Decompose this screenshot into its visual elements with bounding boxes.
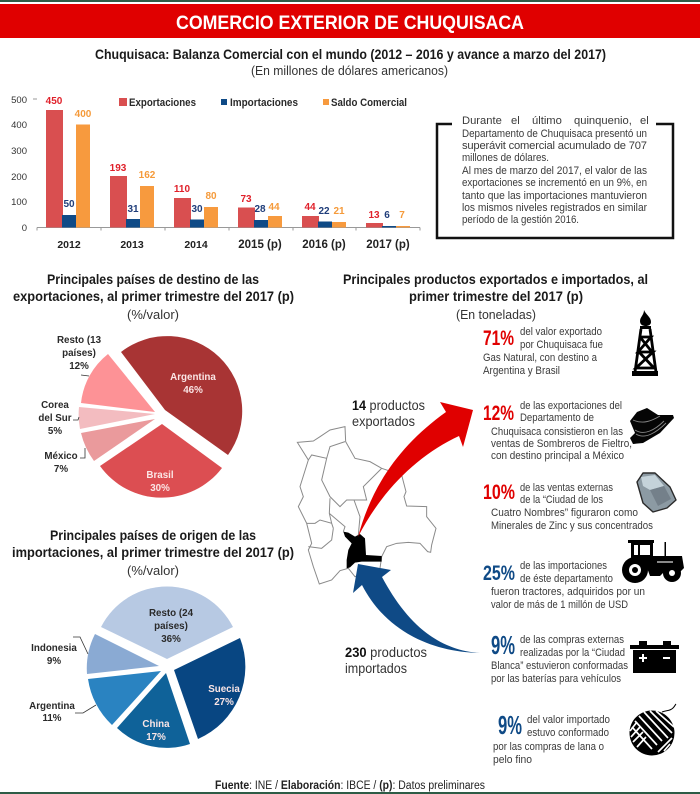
text block: gas natural: 71% [483,326,514,350]
pie chart: destino de exportaciones: países) [62,348,96,359]
pie chart: destino de exportaciones: México [44,451,78,462]
text block: lana: pelo fino [493,754,532,766]
heading: productos [343,271,648,322]
heading: productos: (En toneladas) [456,307,536,322]
pie chart: destino de exportaciones: Argentina [170,372,216,383]
text block: sombreros: de las exportaciones del [520,400,622,412]
bar chart: balanza comercial: 2014 [184,239,208,251]
text block: minerales de zinc: 10% [483,480,515,504]
callout: resumen: los mismos niveles registrados en similar [462,202,647,214]
bar chart: balanza comercial: 80 [205,191,217,202]
pie chart: destino de exportaciones: Brasil [146,470,174,481]
icon: felt hat [630,408,674,444]
bar chart: balanza comercial: 162 [139,170,156,181]
text block: sombreros [483,400,632,462]
text block: lana: por las compras de lana o [493,741,604,753]
pie chart: origen de importaciones: Suecia [208,684,240,695]
bar chart: balanza comercial [11,95,420,251]
text block: gas natural: del valor exportado [520,326,602,338]
pie chart: origen de importaciones: 27% [214,697,234,708]
callout: resumen: Al mes de marzo del 2017, el valor de las [462,165,647,177]
text block: tractores: 25% [483,561,515,585]
pie chart: origen de importaciones: Indonesia [31,643,77,654]
pie chart: origen de importaciones: 36% [161,634,181,645]
pie chart: origen de importaciones: China [142,719,170,730]
pie chart: destino de exportaciones: 5% [48,426,62,437]
pie chart: origen de importaciones [29,586,245,748]
arrow: importaciones [353,564,480,653]
chart legend: Saldo Comercial [331,97,407,109]
bar chart: balanza comercial: 300 [11,146,27,157]
pie chart: origen de importaciones: 11% [42,713,62,724]
callout: resumen: último [532,115,562,127]
label: productos importados: 230 productos [345,644,427,660]
heading: balanza comercial: (En millones de dólares americanos) [251,63,448,78]
bar chart: balanza comercial: 400 [75,109,92,120]
text block: tractores [483,560,645,611]
callout: resumen [437,115,673,238]
text block: tractores: de las importaciones [520,560,607,572]
Chuquisaca region [343,532,382,568]
text block: sombreros: Chuquisaca consistieron en las [491,426,623,438]
bar chart: balanza comercial: 2012 [57,239,81,251]
text block: lana: del valor importado [527,714,610,726]
map of Bolivia [297,427,436,584]
icon: tractor [622,540,684,583]
text block: tractores: de éste departamento [520,573,613,585]
callout: resumen: superávit comercial acumulado de 707 [462,140,647,152]
source note: Fuente: INE / Elaboración: IBCE / (p): Datos preliminares [215,780,485,792]
pie chart: destino de exportaciones: 12% [69,361,89,372]
text block: lana: estuvo conformado [527,727,609,739]
text block: lana: 9% [498,710,522,740]
bar chart: balanza comercial: 2013 [120,239,144,251]
heading: productos: primer trimestre del 2017 (p) [409,288,583,304]
bar chart: balanza comercial: 200 [11,172,27,183]
text block: minerales de zinc [483,480,653,532]
text block: lana [493,710,610,766]
heading: destino de exportaciones [13,271,294,322]
bar chart: balanza comercial: 0 [22,223,27,234]
bar chart: balanza comercial: 44 [268,202,280,213]
label: productos exportados: exportados [352,413,415,429]
chart legend [119,97,407,109]
heading: balanza comercial: Chuquisaca: Balanza Comercial con el mundo (2012 – 2016 y avance a marzo del 2017) [95,46,606,62]
text block: minerales de zinc: Minerales de Zinc y sus concentrados [491,520,653,532]
text block: sombreros: Departamento de [520,412,594,424]
pie chart: origen de importaciones: Resto (24 [149,608,194,619]
bar chart: balanza comercial: 44 [304,202,316,213]
text block: baterias: de las compras externas [520,634,624,646]
pie chart: origen de importaciones: países) [154,621,188,632]
bar chart: balanza comercial: 450 [46,96,63,107]
icon: zinc rock [637,473,676,512]
bar chart: balanza comercial: 400 [11,120,27,131]
bar chart: balanza comercial: 7 [399,210,405,221]
text block: minerales de zinc: Cuatro Nombres” figuraron como [491,507,638,519]
icon: ball of yarn [630,704,676,756]
pie chart: destino de exportaciones: 46% [183,385,203,396]
text block: sombreros: 12% [483,401,514,425]
text block: baterias: Blanca” estuvieron conformadas [491,660,628,672]
bar chart: balanza comercial: 2015 (p) [238,239,282,251]
label: productos exportados [352,397,425,429]
callout: resumen: millones de dólares. [462,152,549,164]
bar chart: balanza comercial: 110 [174,184,191,195]
heading: origen de importaciones [12,527,294,578]
pie chart: destino de exportaciones: del Sur [38,413,72,424]
arrow: exportaciones [358,402,473,537]
label: productos importados: importados [345,660,407,676]
callout: resumen: período de la gestión 2016. [462,214,579,226]
heading: destino de exportaciones: exportaciones, al primer trimestre del 2017 (p) [13,288,294,304]
pie chart: origen de importaciones: 17% [146,732,166,743]
bar chart: balanza comercial: 6 [384,210,390,221]
text block: minerales de zinc: de la “Ciudad de los [520,494,603,506]
chart legend: Importaciones [230,97,298,109]
heading: origen de importaciones: importaciones, al primer trimestre del 2017 (p) [12,544,294,560]
bar chart: balanza comercial: 50 [63,199,75,210]
text block: baterias: 9% [491,630,515,660]
text block: baterias [491,630,628,685]
heading: origen de importaciones: (%/valor) [127,563,179,578]
pie chart: origen de importaciones: 9% [47,656,61,667]
text block: tractores: valor de más de 1 millón de USD [491,599,628,611]
bar chart: balanza comercial: 22 [318,206,330,217]
bar chart: balanza comercial: 31 [127,204,139,215]
bar chart: balanza comercial: 21 [333,206,345,217]
chart legend: Exportaciones [129,97,196,109]
bar chart: balanza comercial: 13 [368,210,380,221]
text block: tractores: fueron tractores, adquiridos por un [491,586,645,598]
heading: destino de exportaciones: Principales países de destino de las [47,271,259,287]
pie chart: destino de exportaciones: 30% [150,483,170,494]
callout: resumen: Departamento de Chuquisaca presentó un [462,128,647,140]
callout: resumen: el [511,115,520,127]
pie chart: destino de exportaciones: Resto (13 [57,335,102,346]
bar chart: balanza comercial: 30 [191,204,203,215]
title banner: COMERCIO EXTERIOR DE CHUQUISACA [176,12,524,34]
bar chart: balanza comercial: 2016 (p) [302,239,346,251]
bar chart: balanza comercial: 28 [254,204,266,215]
icon: battery [630,641,679,673]
label: productos importados [345,644,427,676]
text block: gas natural [483,326,603,377]
text block: baterias: por las baterías para vehículos [491,673,621,685]
pie chart: destino de exportaciones [38,335,242,498]
bar chart: balanza comercial: 100 [11,197,27,208]
bar chart: balanza comercial: 193 [110,163,127,174]
bar chart: balanza comercial: 500 [11,95,27,106]
text block: gas natural: por Chuquisaca fue [520,339,603,351]
text block: minerales de zinc: de las ventas externas [520,482,613,494]
icon: oil derrick [632,310,658,376]
bar chart: balanza comercial: 2017 (p) [366,239,410,251]
pie chart: destino de exportaciones: 7% [54,464,68,475]
heading: destino de exportaciones: (%/valor) [127,307,179,322]
heading: balanza comercial [95,46,606,78]
label: productos exportados: 14 productos [352,397,425,413]
text block: gas natural: Gas Natural, con destino a [483,352,598,364]
text block: sombreros: ventas de Sombreros de Fieltro, [491,438,632,450]
callout: resumen: tanto que las importaciones mantuvieron [462,190,647,202]
heading: origen de importaciones: Principales países de origen de las [50,527,256,543]
title banner [0,4,700,38]
heading: productos: Principales productos exportados e importados, al [343,271,648,287]
pie chart: origen de importaciones: Argentina [29,701,75,712]
text block: sombreros: con destino principal a México [491,450,624,462]
callout: resumen: Durante [462,115,502,127]
pie chart: destino de exportaciones: Corea [41,400,69,411]
callout: resumen: quinquenio, [574,115,632,127]
text block: gas natural: Argentina y Brasil [483,365,560,377]
text block: baterias: realizadas por la “Ciudad [520,647,625,659]
bar chart: balanza comercial: 73 [240,194,252,205]
callout: resumen: el [640,115,649,127]
callout: resumen: exportaciones se incrementó en un 9%, en [462,177,647,189]
